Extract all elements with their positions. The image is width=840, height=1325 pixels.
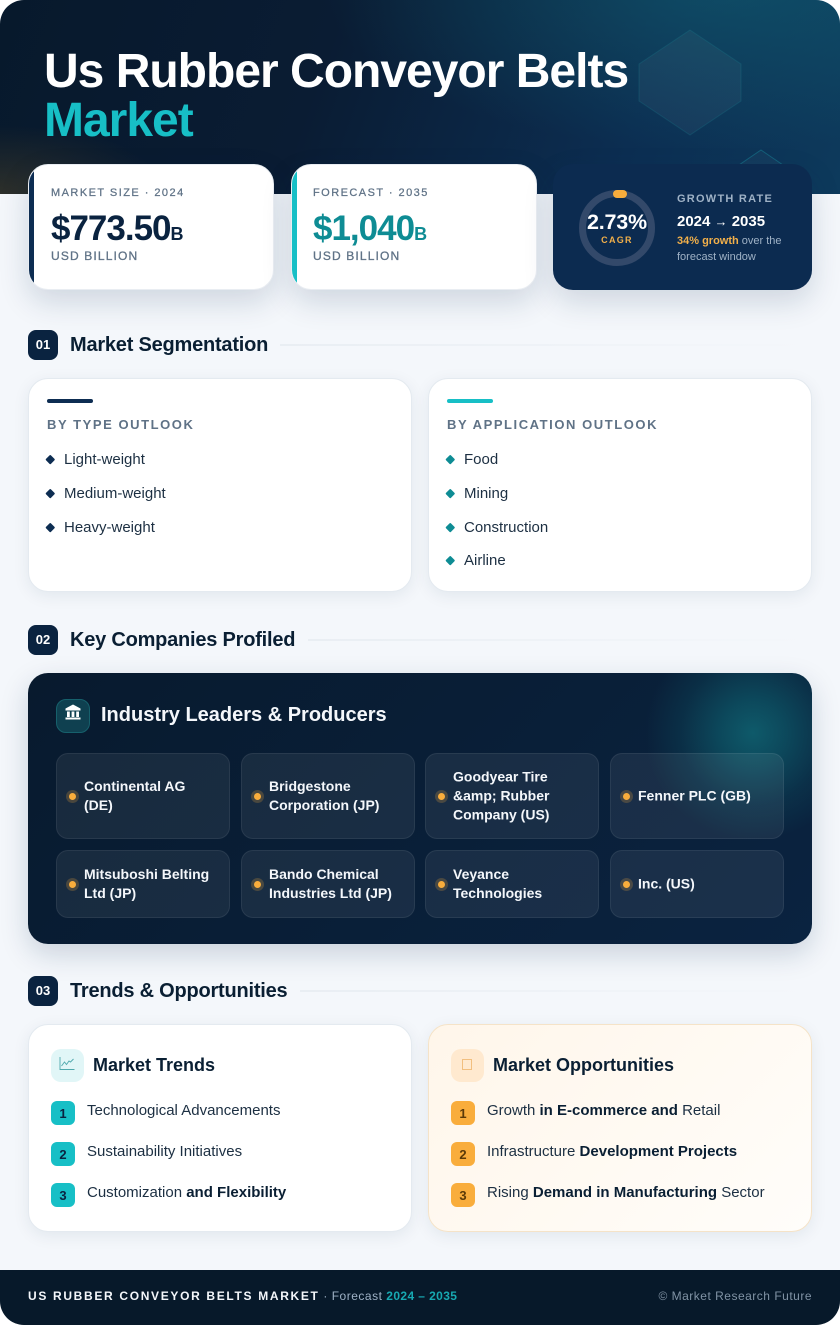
company: inc <box>610 850 784 918</box>
growth years: 2024 → 2035 <box>677 213 765 230</box>
company: veyance <box>425 850 599 918</box>
panel: market opportunities <box>428 1024 812 1232</box>
growth rate heading: GROWTH RATE <box>677 193 773 205</box>
section heading: key companies: Key Companies Profiled <box>70 629 295 651</box>
heading: Market Trends <box>93 1055 215 1075</box>
icon: placeholder box <box>451 1049 484 1082</box>
stat card: market size: USD BILLION <box>51 249 138 263</box>
company: bando: Bando Chemical <box>269 866 379 882</box>
footer <box>0 1270 840 1325</box>
panel: market opportunities: Growth in E-commerce and Retail <box>487 1102 720 1119</box>
growth note <box>677 235 782 263</box>
section number 01 <box>28 330 58 360</box>
company: continental: (DE) <box>84 797 113 813</box>
title: Us Rubber Conveyor Belts <box>44 45 628 98</box>
company: veyance: Technologies <box>453 885 542 901</box>
decorative hexagons <box>638 30 782 164</box>
section number 01: 01 <box>36 337 50 352</box>
panel: by application outlook: Airline <box>464 552 506 569</box>
growth rate card <box>553 164 812 290</box>
section number 02: 02 <box>36 632 50 647</box>
company: continental <box>56 753 230 839</box>
heading: Market Opportunities <box>493 1055 674 1075</box>
panel: market trends: 2 <box>59 1147 67 1162</box>
panel: industry leaders <box>28 673 812 944</box>
stat card: forecast <box>291 164 537 290</box>
panel: market opportunities: 1 <box>459 1106 467 1121</box>
panel: by type outlook: Medium-weight <box>64 485 166 502</box>
company: bando: Industries Ltd (JP) <box>269 885 392 901</box>
stat card: market size: $773.50B <box>51 209 184 248</box>
panel: market trends: Technological Advancements <box>87 1102 280 1119</box>
panel: market opportunities: 2 <box>459 1147 467 1162</box>
shadow behind leaders panel <box>28 673 812 944</box>
company: goodyear: &amp; Rubber <box>453 788 549 804</box>
growth note: forecast window <box>677 251 756 263</box>
section heading: trends: Trends & Opportunities <box>70 980 287 1002</box>
company: inc: Inc. (US) <box>638 876 695 892</box>
panel: by type outlook: BY TYPE OUTLOOK <box>47 417 194 432</box>
company: mitsuboshi: Ltd (JP) <box>84 885 136 901</box>
header banner <box>0 0 840 194</box>
panel: by application outlook: Food <box>464 451 498 468</box>
company: goodyear: Goodyear Tire <box>453 768 548 784</box>
section number 03: 03 <box>36 983 50 998</box>
growth note: 34% growth over the <box>677 235 782 247</box>
CAGR value: 2.73% <box>587 210 647 234</box>
stat card: forecast: $1,040B <box>313 209 427 248</box>
company: mitsuboshi <box>56 850 230 918</box>
stat card: forecast: USD BILLION <box>313 249 400 263</box>
stat card: market size <box>28 164 274 290</box>
stat card: market size: MARKET SIZE · 2024 <box>51 187 185 199</box>
panel heading: Industry Leaders & Producers <box>101 704 387 726</box>
title: Market <box>44 94 193 147</box>
panel: by application outlook: Mining <box>464 485 508 502</box>
panel: by type outlook: Heavy-weight <box>64 519 155 536</box>
section number 02 <box>28 625 58 655</box>
footer credit: © Market Research Future <box>658 1289 812 1303</box>
company: continental: Continental AG <box>84 778 185 794</box>
panel: market trends: 1 <box>59 1106 67 1121</box>
panel: market trends <box>28 1024 412 1232</box>
panel: market opportunities: Rising Demand in Manufacturing Sector <box>487 1184 765 1201</box>
icon: trend chart <box>51 1049 84 1082</box>
panel: market trends: 3 <box>59 1188 67 1203</box>
panel: market trends: Sustainability Initiatives <box>87 1143 242 1160</box>
CAGR label: CAGR <box>601 235 633 245</box>
company: mitsuboshi: Mitsuboshi Belting <box>84 866 209 882</box>
panel: by type outlook: Light-weight <box>64 451 145 468</box>
stat card: forecast: FORECAST · 2035 <box>313 187 429 199</box>
company: bridgestone: Bridgestone <box>269 778 351 794</box>
company: bando <box>241 850 415 918</box>
section number 03 <box>28 976 58 1006</box>
panel: by type outlook <box>28 378 412 592</box>
section heading: market segmentation: Market Segmentation <box>70 334 268 356</box>
company: fenner <box>610 753 784 839</box>
footer title: US RUBBER CONVEYOR BELTS MARKET · Forecast 2024 – 2035 <box>28 1289 457 1303</box>
company: bridgestone <box>241 753 415 839</box>
panel: market opportunities: 3 <box>459 1188 467 1203</box>
panel: by application outlook: Construction <box>464 519 548 536</box>
panel: market trends: Customization and Flexibility <box>87 1184 286 1201</box>
icon: institution <box>56 699 90 733</box>
panel: market opportunities: Infrastructure Development Projects <box>487 1143 737 1160</box>
panel: by application outlook: BY APPLICATION OUTLOOK <box>447 417 658 432</box>
panel: by application outlook <box>428 378 812 592</box>
company: fenner: Fenner PLC (GB) <box>638 788 751 804</box>
CAGR ring <box>579 190 655 266</box>
company: goodyear <box>425 753 599 839</box>
company: goodyear: Company (US) <box>453 806 549 822</box>
company: bridgestone: Corporation (JP) <box>269 797 379 813</box>
company: veyance: Veyance <box>453 866 509 882</box>
title <box>44 45 628 147</box>
